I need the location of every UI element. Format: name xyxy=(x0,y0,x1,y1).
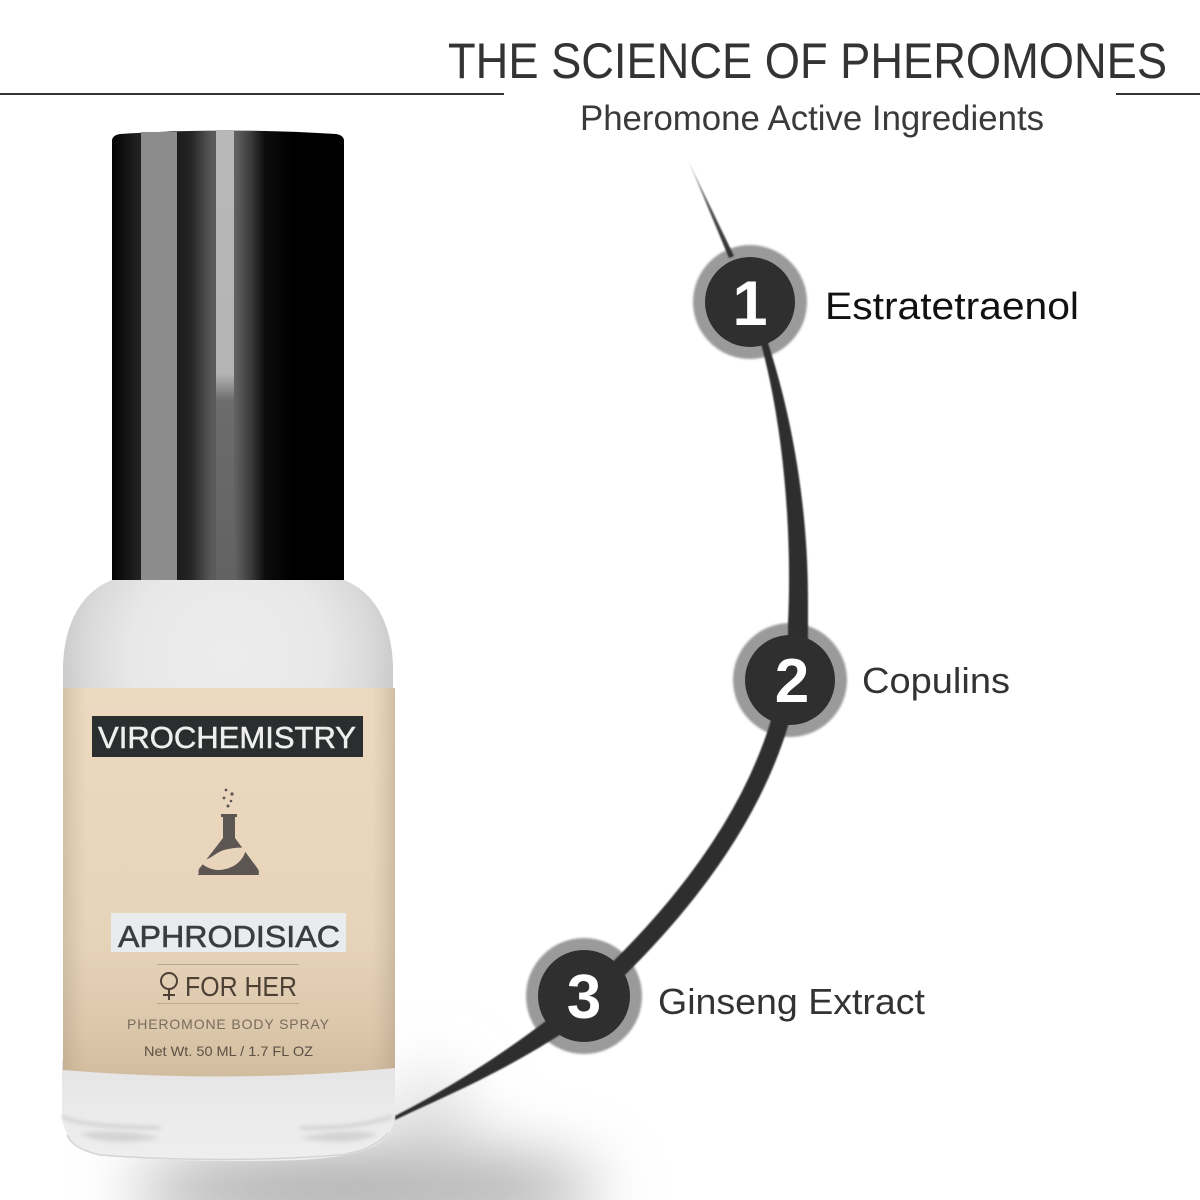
for her text: FOR HER xyxy=(185,971,297,1002)
circle halos xyxy=(526,245,847,1054)
step 2: Copulins: 2 xyxy=(775,647,809,716)
subtitle: Pheromone Active Ingredients xyxy=(580,99,1044,138)
step 1: Estratetraenol xyxy=(705,257,1079,347)
bottle cap xyxy=(112,130,344,580)
step 3: Ginseng Extract: 3 xyxy=(567,963,601,1032)
bottle shadow xyxy=(130,1072,600,1200)
header rule right xyxy=(1116,93,1200,95)
brand banner: VIROCHEMISTRY xyxy=(98,720,356,755)
step 3: Ginseng Extract: Ginseng Extract xyxy=(658,981,925,1022)
step 2: Copulins: Copulins xyxy=(862,660,1010,701)
icon: flask with leaf xyxy=(197,789,259,875)
step 1: Estratetraenol: Estratetraenol xyxy=(825,286,1079,328)
icon: female symbol xyxy=(161,973,177,1000)
bottle base xyxy=(62,1060,395,1161)
net weight: Net Wt. 50 ML / 1.7 FL OZ xyxy=(144,1043,313,1059)
product name: APHRODISIAC xyxy=(118,919,340,954)
product label xyxy=(63,688,395,1077)
step 3: Ginseng Extract xyxy=(538,950,925,1042)
bottle shoulder xyxy=(63,580,393,700)
step 1: Estratetraenol: 1 xyxy=(732,269,768,339)
product bottle xyxy=(62,130,395,1161)
header rule left xyxy=(0,93,504,95)
step 2: Copulins xyxy=(745,635,1010,725)
spray descriptor: PHEROMONE BODY SPRAY xyxy=(127,1016,330,1032)
curved timeline line xyxy=(395,160,808,1120)
